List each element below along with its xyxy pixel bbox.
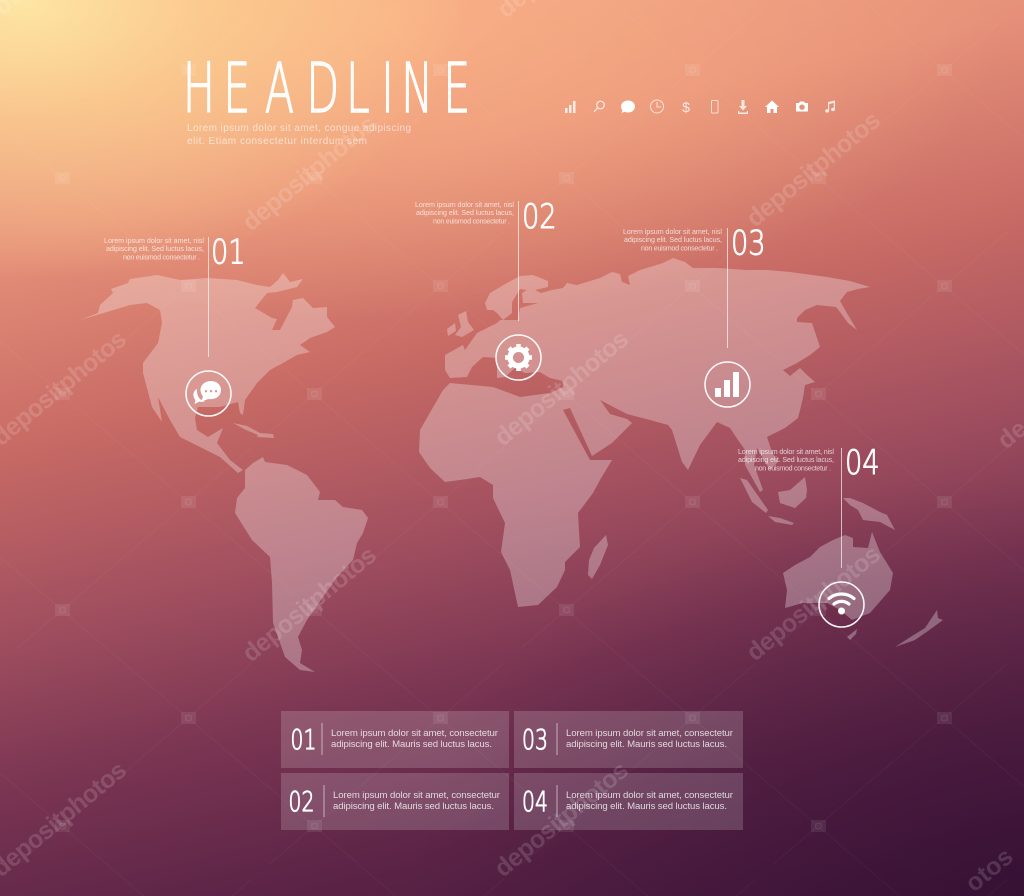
callout 04: 04 bbox=[845, 443, 880, 483]
callout 01: 01 bbox=[211, 233, 246, 272]
marker: gear icon bbox=[496, 335, 541, 380]
callout 02: Lorem ipsum dolor sit amet, nisl bbox=[415, 201, 514, 209]
Madagascar bbox=[588, 535, 608, 579]
world map bbox=[80, 258, 943, 672]
callout 03: 03 bbox=[731, 224, 766, 263]
panel: 04 bbox=[514, 773, 743, 830]
subtitle: elit. Etiam consectetur interdum sem bbox=[187, 136, 367, 147]
panel: 04: Lorem ipsum dolor sit amet, consectetur bbox=[566, 790, 734, 801]
panel: 02 bbox=[281, 773, 509, 830]
Tasmania bbox=[847, 629, 857, 640]
panel: 03: Lorem ipsum dolor sit amet, consectetur bbox=[566, 728, 734, 739]
New Guinea bbox=[843, 498, 895, 530]
callout 03: Lorem ipsum dolor sit amet, nisl bbox=[623, 228, 722, 236]
panel: 03: 03 bbox=[522, 724, 548, 756]
watermarks: depositphotos bbox=[237, 110, 382, 237]
title: HEADLINE bbox=[183, 48, 470, 129]
panel: 03 bbox=[514, 711, 743, 768]
Java bbox=[768, 516, 794, 525]
watermarks: depositphotos bbox=[237, 541, 382, 668]
icon: bars bbox=[565, 101, 576, 113]
callout 01: non euismod consectetur . bbox=[123, 254, 200, 262]
icon: home bbox=[765, 100, 779, 113]
panel: 01: 01 bbox=[290, 724, 316, 756]
panel: 02: adipiscing elit. Mauris sed luctus lacus. bbox=[333, 801, 494, 812]
panel: 01: adipiscing elit. Mauris sed luctus lacus. bbox=[331, 739, 492, 750]
marker: chat icon bbox=[186, 371, 231, 416]
subtitle bbox=[187, 123, 411, 147]
panel: 02: Lorem ipsum dolor sit amet, consectetur bbox=[333, 790, 501, 801]
callout 04 bbox=[738, 443, 880, 627]
callout 02 bbox=[415, 197, 557, 380]
watermarks: otos bbox=[960, 842, 1018, 896]
Caribbean islands bbox=[233, 423, 274, 438]
watermarks: depositphotos bbox=[741, 540, 886, 667]
icon row bbox=[565, 99, 835, 115]
callout 02: non euismod consectetur . bbox=[433, 218, 510, 226]
watermarks: depositphotos bbox=[741, 106, 886, 233]
callout 01 bbox=[104, 233, 246, 416]
panel: 01 bbox=[281, 711, 509, 768]
callout 01: Lorem ipsum dolor sit amet, nisl bbox=[104, 237, 204, 245]
callout 03: non euismod consectetur . bbox=[641, 244, 718, 252]
Ireland bbox=[447, 323, 456, 336]
callout 01: adipiscing elit. Sed luctus lacus, bbox=[106, 245, 204, 253]
watermarks: depositphotos bbox=[489, 325, 634, 452]
panel: 04: 04 bbox=[522, 786, 548, 818]
callout 04: adipiscing elit. Sed luctus lacus, bbox=[738, 456, 834, 464]
Eurasia and Africa bbox=[419, 258, 870, 607]
Borneo bbox=[778, 477, 807, 508]
panel: 02: 02 bbox=[288, 786, 314, 818]
icon: download bbox=[738, 100, 748, 114]
North America bbox=[80, 273, 335, 473]
panel: 01: Lorem ipsum dolor sit amet, consectetur bbox=[331, 728, 499, 739]
callout 02: adipiscing elit. Sed luctus lacus, bbox=[416, 209, 514, 217]
panel: 03: adipiscing elit. Mauris sed luctus lacus. bbox=[566, 739, 727, 750]
subtitle: Lorem ipsum dolor sit amet, congue adipiscing bbox=[187, 123, 411, 134]
marker: bar chart icon bbox=[705, 362, 750, 407]
callout 04: Lorem ipsum dolor sit amet, nisl bbox=[738, 448, 834, 456]
panel: 04: adipiscing elit. Mauris sed luctus lacus. bbox=[566, 801, 727, 812]
watermarks: depositphotos bbox=[489, 756, 634, 883]
icon: clock bbox=[650, 100, 664, 113]
Sumatra bbox=[740, 478, 768, 513]
icon: music note bbox=[825, 100, 835, 113]
New Zealand bbox=[895, 610, 943, 647]
icon: search bbox=[594, 101, 604, 112]
icon: speech bubble bbox=[621, 100, 635, 113]
South America bbox=[235, 457, 368, 672]
callout 02: 02 bbox=[522, 197, 557, 237]
callout 04: non euismod consectetur . bbox=[755, 464, 831, 472]
icon: dollar: $ bbox=[682, 99, 690, 115]
callout 03 bbox=[623, 224, 766, 407]
icon: camera bbox=[796, 102, 808, 112]
callout 03: adipiscing elit. Sed luctus lacus, bbox=[624, 236, 722, 244]
United Kingdom bbox=[455, 311, 474, 337]
marker: wifi icon bbox=[819, 582, 864, 627]
Australia bbox=[783, 532, 893, 620]
icon: phone bbox=[712, 100, 718, 113]
